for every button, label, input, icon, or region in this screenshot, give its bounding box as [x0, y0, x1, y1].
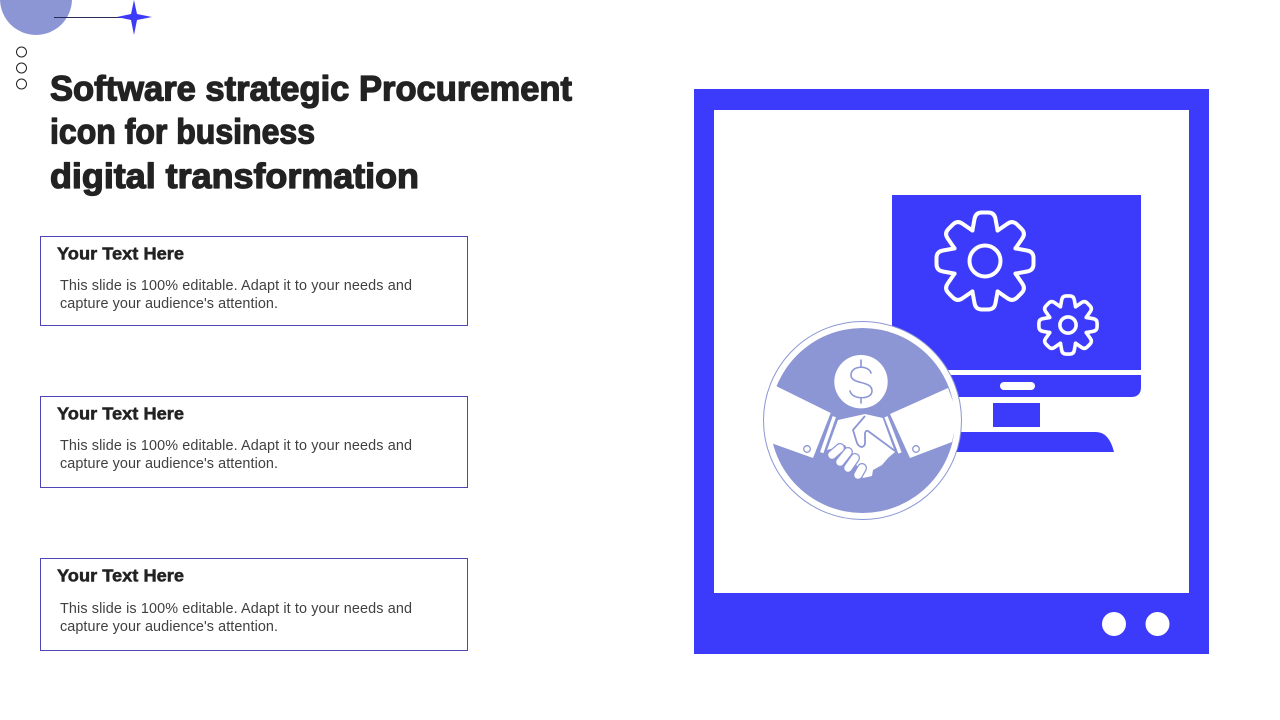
icon: large gear [936, 212, 1034, 310]
title [50, 70, 572, 196]
heading: text box 1: Your Text Here [57, 244, 184, 264]
icon: computer monitor [892, 195, 1141, 452]
body: text box 1 [60, 278, 412, 312]
decoration: three small circles [16, 47, 26, 89]
decoration: corner circle, line and star [0, 0, 152, 35]
icon: handshake medallion [764, 322, 962, 520]
panel: text box 2 [40, 396, 468, 488]
icon: small gear [1039, 296, 1097, 354]
panel: text box 1 [40, 236, 468, 326]
body: text box 1: capture your audience's attention. [60, 296, 278, 312]
title: icon for business [50, 112, 315, 152]
icon: right sleeve [886, 388, 958, 458]
panel: text box 3 [40, 558, 468, 650]
body: text box 3: capture your audience's attention. [60, 619, 278, 635]
icon: dollar coin [834, 355, 888, 408]
body: text box 2 [60, 438, 412, 472]
heading: text box 3: Your Text Here [57, 566, 184, 586]
body: text box 3: This slide is 100% editable. Adapt it to your needs and [60, 601, 412, 617]
body: text box 3 [60, 601, 412, 635]
title: Software strategic Procurement [50, 70, 572, 108]
body: text box 2: capture your audience's attention. [60, 456, 278, 472]
heading: text box 2: Your Text Here [57, 404, 184, 424]
panel: tablet frame [694, 89, 1209, 654]
title: digital transformation [50, 157, 419, 196]
icon: left sleeve [767, 386, 834, 458]
body: text box 1: This slide is 100% editable. Adapt it to your needs and [60, 278, 412, 294]
body: text box 2: This slide is 100% editable. Adapt it to your needs and [60, 438, 412, 454]
icon: clasped hands [827, 414, 895, 478]
